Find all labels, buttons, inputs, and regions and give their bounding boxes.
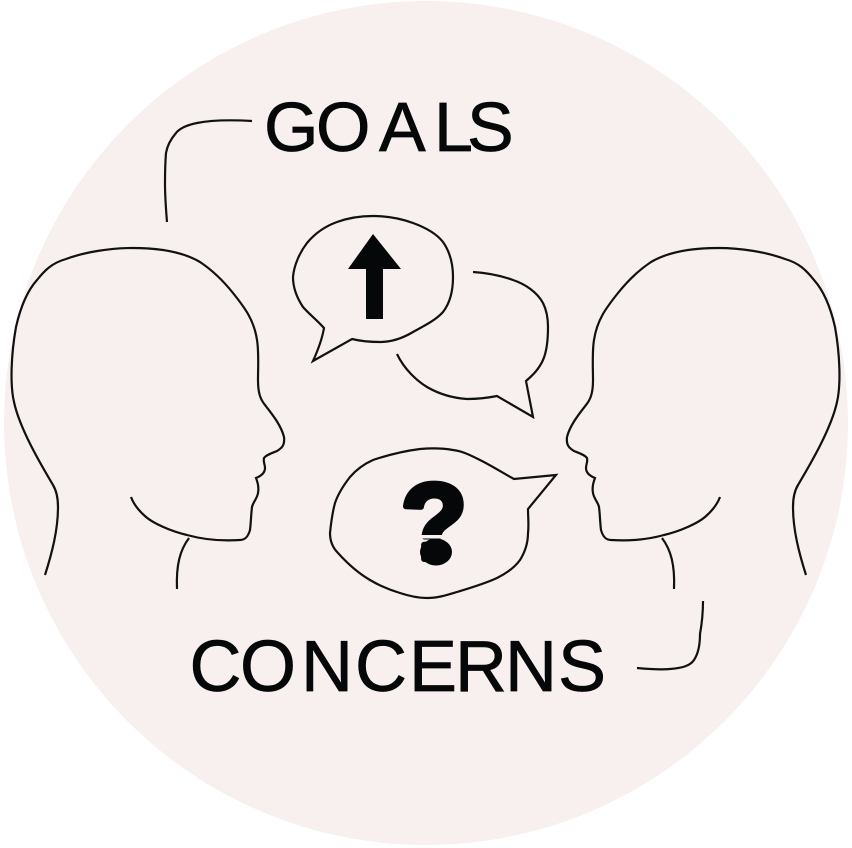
connector: concerns to right head	[637, 601, 703, 669]
speech bubble: empty reply	[397, 272, 548, 417]
left head outline	[12, 248, 284, 589]
right head outline	[567, 248, 839, 589]
connector: goals to left head	[165, 120, 252, 222]
icon: question mark: ?	[401, 461, 467, 582]
speech bubble: question mark	[330, 448, 556, 598]
heading: concerns: CONCERNS	[190, 627, 606, 707]
icon: up arrow	[348, 234, 401, 319]
speech bubble: up arrow	[293, 216, 453, 361]
heading: goals: GOALS	[264, 88, 514, 166]
